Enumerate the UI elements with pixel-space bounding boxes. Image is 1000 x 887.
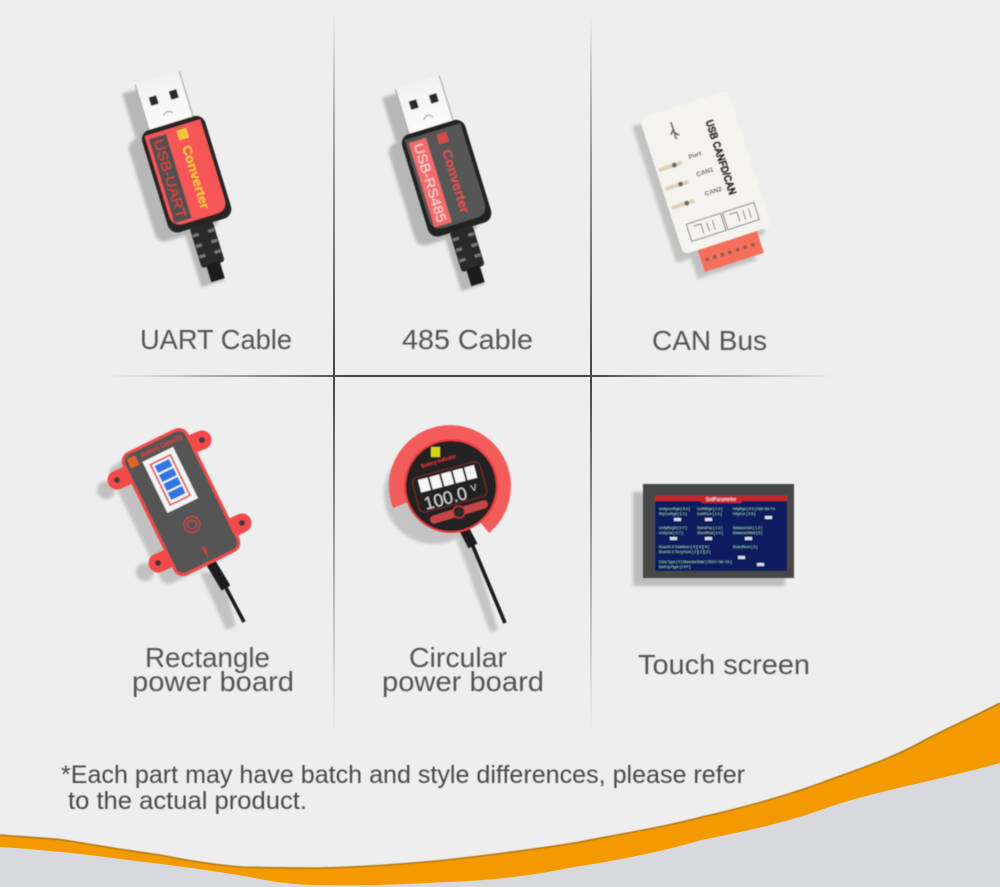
enclosure	[639, 90, 772, 255]
parameter rows: BalanceVolt [ 1.2 ]	[733, 526, 762, 530]
status labels: CAN1	[696, 166, 715, 179]
status labels: Port	[688, 150, 703, 161]
housing: USB-RS485	[411, 141, 450, 224]
title: Battery Indicator	[421, 453, 458, 470]
parameter rows: HttyCur [ 0.5 ]	[733, 512, 755, 516]
parameter rows: Board1-3 TotalNum [ 4 ][ 4 ][ 4 ]	[659, 545, 709, 549]
red outer ring	[389, 425, 511, 533]
housing: Converter	[439, 147, 473, 215]
wiring boxes	[686, 202, 759, 241]
parameter rows: BatCapType [ LFP ]	[659, 565, 690, 569]
parameter rows: UnityLenRgd [ 3.0 ]	[659, 507, 690, 511]
parameter rows: Board1-3 TempNum [ 2 ][ 2 ][ 2 ]	[659, 550, 710, 554]
status labels: CAN2	[704, 186, 723, 198]
parameter rows: CellNRgd [ 1.0 ]	[697, 507, 722, 511]
frame	[643, 484, 794, 578]
housing	[139, 113, 234, 235]
label: Rectangle power board: Rectangle	[145, 642, 270, 673]
terminal block	[697, 229, 764, 272]
label: UART Cable: UART Cable	[140, 324, 292, 355]
header bar	[655, 496, 787, 503]
parameter rows: UnityRegld [ 0.7 ]	[659, 526, 687, 530]
parameter rows: RtyCurRgd [ 1.0 ]	[659, 512, 687, 516]
plug	[135, 71, 194, 133]
board title: Battery Capacity	[140, 433, 184, 459]
parameter rows: StandRcd [ 1.0 ]	[697, 531, 723, 535]
bottom swoosh	[0, 703, 1000, 887]
buttons	[670, 516, 772, 566]
power button	[181, 514, 203, 535]
parameter rows: CellRCur [ 1.0 ]	[697, 512, 722, 516]
label: Rectangle power board: power board	[132, 666, 294, 697]
label: Touch screen: Touch screen	[638, 649, 810, 680]
label: Circular power board	[382, 642, 544, 697]
logo	[431, 447, 440, 457]
product: touch screen	[633, 484, 794, 586]
parameter rows: BoardNum [ 3 ]	[733, 545, 757, 549]
product: circular power board	[384, 425, 511, 632]
model name: USB CANFD/CAN	[703, 119, 738, 197]
status labels	[688, 148, 723, 199]
cable	[462, 525, 505, 623]
disclaimer note: *Each part may have batch and style differences, please refer	[61, 761, 745, 789]
parameter rows: BalanceDiffed [ 5 ]	[733, 531, 762, 535]
label: Circular power board: power board	[382, 666, 544, 697]
display: 100.0	[422, 483, 469, 514]
disclaimer note: to the actual product.	[68, 787, 307, 815]
product: rectangle power board	[97, 426, 245, 630]
housing	[399, 117, 494, 239]
charge indicator	[201, 544, 210, 558]
strain relief cable	[450, 225, 489, 288]
label: CAN Bus: CAN Bus	[652, 325, 767, 356]
cable	[205, 553, 244, 622]
label: 485 Cable: 485 Cable	[402, 324, 533, 355]
label: Circular power board: Circular	[409, 642, 507, 673]
header bar: SetParameter	[706, 497, 737, 503]
product: RS485 cable	[373, 72, 511, 300]
parameter rows: HttyRgd [ 0.5 ] NW: 84.7%	[733, 507, 776, 511]
parameter rows	[659, 507, 776, 569]
plug	[395, 75, 454, 137]
mounting ears	[117, 440, 242, 563]
product: UART cable	[113, 68, 251, 296]
navy display	[655, 496, 787, 571]
dark face	[405, 440, 497, 532]
parameter rows: Data Type [ 0 ] ManufacDate [ 2024 / 08 / 01 ]	[659, 560, 732, 564]
label: Rectangle power board	[132, 642, 294, 697]
strain relief cable	[190, 221, 229, 284]
USB symbol	[667, 121, 680, 140]
LEDs	[658, 160, 695, 210]
board body	[120, 426, 242, 578]
parameter rows: UnityCal [ 0.7 ]	[659, 531, 683, 535]
parameter rows: StandFac [ 1.0 ]	[697, 526, 722, 530]
battery window	[142, 447, 198, 513]
bottom buttons strip	[429, 497, 489, 527]
disclaimer note	[61, 761, 745, 815]
display	[411, 461, 489, 515]
housing: USB-UART	[151, 137, 190, 221]
logo	[127, 455, 139, 468]
display: V	[470, 482, 478, 493]
housing: Converter	[179, 143, 213, 211]
product: CAN bus adapter	[632, 90, 779, 284]
